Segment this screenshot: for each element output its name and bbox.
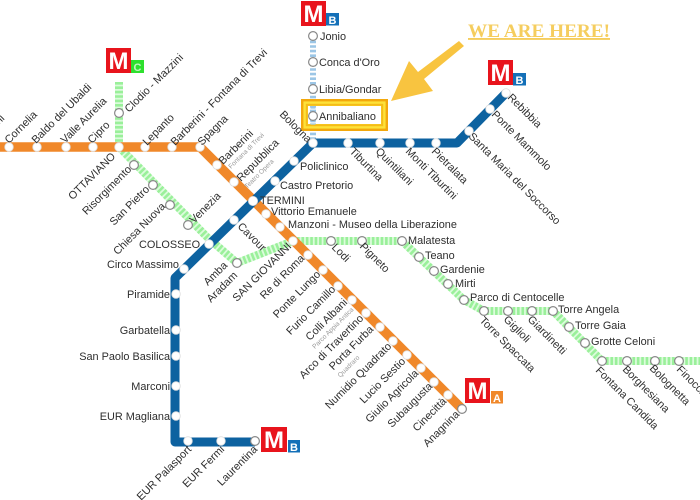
logo: metro B right: B <box>516 75 524 87</box>
labels: line C eastern section: Torre Spaccata <box>477 315 538 376</box>
labels: line C eastern section: Giardinetti <box>525 314 568 357</box>
labels: line C central section: Aradam <box>205 270 240 305</box>
labels: line A south-east: Cinecittà <box>411 395 450 434</box>
labels: line C central section: Venezia <box>188 190 224 226</box>
labels: line A south-east: Colli Albani <box>304 297 350 343</box>
labels: line A south-east: Lucio Sestio <box>358 356 408 406</box>
labels: line B south: Laurentina <box>215 443 261 489</box>
labels: line B south: Marconi <box>131 381 170 393</box>
logo: metro B bottom: M <box>264 427 284 454</box>
logo: metro B bottom: B <box>290 442 298 454</box>
labels: line B south: EUR Magliana <box>100 411 171 423</box>
labels: line A south-east: Ponte Lungo <box>271 269 323 321</box>
labels: line C central section: Gardenie <box>440 264 485 276</box>
logo: metro B top <box>301 1 339 28</box>
stations: line C <box>115 32 683 445</box>
line B blue track <box>175 93 506 442</box>
labels: line B north-east: Vittorio Emanuele <box>271 206 357 218</box>
labels: line A horizontal section: Clodio - Mazzini <box>123 52 186 115</box>
logo: metro B top: B <box>329 15 337 27</box>
logo: metro C: M <box>108 48 128 75</box>
line A orange track <box>0 147 462 409</box>
labels: line A horizontal section: OTTAVIANO <box>66 151 118 202</box>
labels: line C eastern section: Torre Angela <box>558 304 620 316</box>
heading: we are here: WE ARE HERE! <box>468 21 610 42</box>
labels: line B south: Garbatella <box>120 325 171 337</box>
labels: line C eastern section: Torre Gaia <box>575 320 627 332</box>
labels: line A horizontal section: Cipro <box>86 119 113 146</box>
arrow: pointing to Annibaliano <box>391 41 464 101</box>
labels: line C eastern section: Fontana Candida <box>593 365 661 433</box>
labels: line A horizontal section: Barberini <box>217 128 256 167</box>
labels: line B north-east: Rebibbia <box>505 92 544 131</box>
labels: line B north-east: TERMINI <box>260 195 305 207</box>
logo: metro C: C <box>134 62 142 74</box>
labels: line C central section: Parco di Centocelle <box>470 292 564 304</box>
labels: line B north-east: Monti Tiburtini <box>403 146 459 202</box>
labels: line C central section <box>80 164 564 305</box>
labels: line A horizontal section: Spagna <box>196 112 231 148</box>
logo: metro A: M <box>468 378 488 405</box>
logo: metro A <box>465 378 503 405</box>
labels: line C central section: Lodi <box>329 242 352 265</box>
labels: line C central section: Teano <box>425 250 455 262</box>
labels: line A horizontal section: Barberini - Fontana di Trevi <box>169 47 270 148</box>
logo: metro C <box>106 48 144 75</box>
labels: line A horizontal section: Baldo del Ubaldi <box>30 82 94 146</box>
labels: line B north-east: Bologna <box>277 109 314 146</box>
labels: line C central section: Mirti <box>455 278 476 290</box>
labels: line B north-east: Ponte Mammolo <box>489 109 553 173</box>
labels: line C eastern section: Bolognetta <box>647 363 693 409</box>
labels: line A south-east: Quadraro <box>337 354 362 379</box>
labels: line B south: Cavour <box>235 221 268 254</box>
labels: line C central section: Risorgimento <box>80 164 134 217</box>
labels: line B south: COLOSSEO <box>139 239 200 251</box>
labels: line B north-east: Conca d'Oro <box>319 57 380 69</box>
logo: metro B right <box>488 60 526 87</box>
labels: line B north-east: Santa Maria del Soccorso <box>466 131 563 227</box>
line B branch continuation inside highlight box <box>310 106 316 125</box>
labels: line B north-east: Quintiliani <box>373 146 415 188</box>
labels: line C eastern section: Grotte Celoni <box>591 336 655 348</box>
labels: line C central section: Pigneto <box>357 241 392 275</box>
labels: line B south: Circo Massimo <box>107 259 179 271</box>
logo: metro A: A <box>493 393 501 405</box>
labels: line A south-east: Furio Camillo <box>284 284 338 337</box>
labels: line C eastern section: Borghesiana <box>620 364 672 416</box>
labels: line A horizontal section: Cornelia <box>3 108 40 146</box>
logo: metro B bottom <box>261 427 300 454</box>
labels: line C central section: SAN GIOVANNI <box>231 241 294 304</box>
labels: line C eastern section <box>477 304 700 433</box>
labels: line C central section: Amba <box>202 259 231 288</box>
labels: line C central section: Malatesta <box>408 235 456 247</box>
labels: line C eastern section: Giglioli <box>501 314 532 345</box>
labels: line B south: EUR Fermi <box>181 444 227 490</box>
labels: line B north-east: Manzoni - Museo della Liberazione <box>288 219 457 231</box>
logo: metro B right: M <box>490 60 510 87</box>
labels: line C central section: San Pietro <box>108 184 152 228</box>
labels: line B north-east: Pietralata <box>429 146 471 187</box>
labels: line B south: Piramide <box>127 289 170 301</box>
labels: line A horizontal section: Teatro Opera <box>243 158 276 190</box>
labels: line A south-east: Re di Roma <box>258 252 308 302</box>
stations: lines A and B <box>5 89 510 445</box>
labels: line A south-east: Arco di Travertino <box>297 313 366 381</box>
labels: line A south-east: Giulio Agricola <box>363 367 422 425</box>
labels: line B north-east: Castro Pretorio <box>280 180 353 192</box>
labels: line A south-east: Porta Furba <box>327 323 377 373</box>
labels: line B north-east: Policlinico <box>300 161 348 173</box>
labels: line A horizontal section: Fontana di Trevi <box>227 132 266 170</box>
labels: line C central section: Chiesa Nuova <box>111 200 169 258</box>
labels: line B north-east <box>260 31 563 231</box>
labels: line A horizontal section <box>0 47 282 202</box>
labels: line A horizontal section: Valle Aurelia <box>59 95 110 146</box>
labels: line A south-east: Parco Appia Antica <box>311 306 356 351</box>
labels: line B north-east: Jonio <box>320 31 346 43</box>
labels: line B north-east: Libia/Gondar <box>319 84 382 96</box>
highlight box: Annibaliano <box>302 100 387 130</box>
labels: line A south-east: Anagnina <box>421 408 463 450</box>
labels: line A horizontal section: Lepanto <box>141 112 177 148</box>
labels: line B north-east: Tiburtina <box>347 146 386 184</box>
line B branch track <box>310 36 316 143</box>
logo: metro B top: M <box>304 1 324 28</box>
labels: line A south-east <box>258 252 463 450</box>
labels: line A horizontal section: Repubblica <box>235 136 282 184</box>
labels: line B north-east: Annibaliano <box>319 111 376 123</box>
line C green track <box>119 82 700 361</box>
labels: line A south-east: Numidio Quadrato <box>323 341 394 412</box>
labels: line A south-east: Subaugusta <box>386 380 436 430</box>
labels: line B south <box>79 221 268 500</box>
labels: line B south: San Paolo Basilica <box>79 351 171 363</box>
